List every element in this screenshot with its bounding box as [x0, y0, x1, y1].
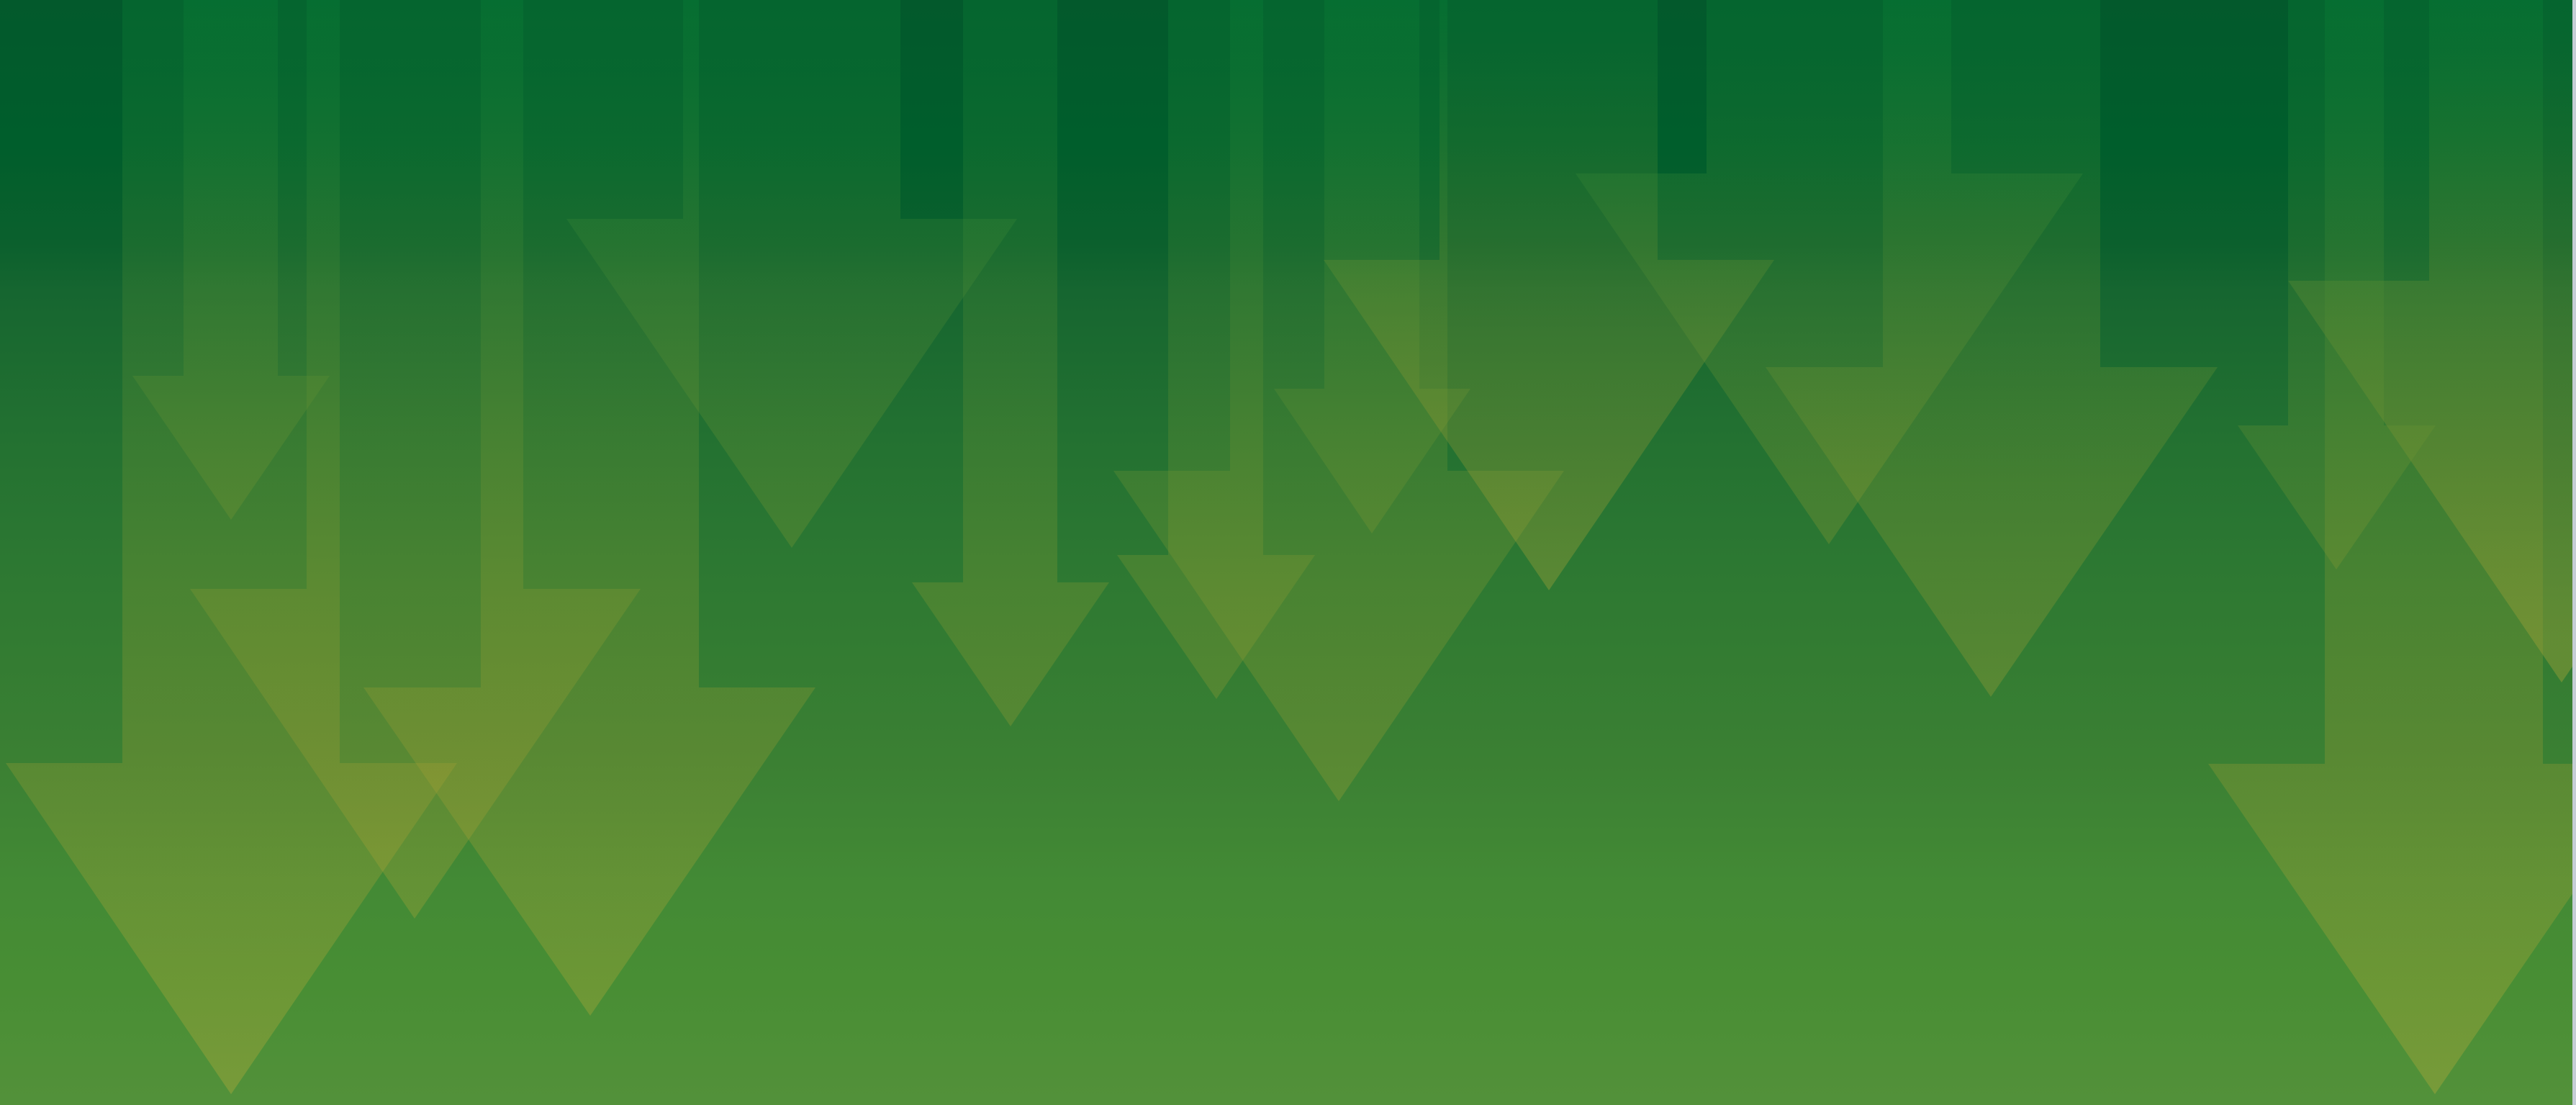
arrow 5: large upper left centre [566, 0, 1017, 548]
arrow 11: large upper right [1576, 0, 2083, 544]
arrow 2: small far left [132, 0, 330, 520]
arrow 1: large far left [6, 0, 457, 1094]
arrow 4: large left centre [363, 0, 815, 1016]
arrow 8: small centre [1117, 0, 1315, 699]
arrow 3: large left [190, 0, 641, 919]
arrow 13: largest, clipped at right edge [2288, 0, 2576, 682]
arrow 14: small far right [2238, 0, 2411, 569]
arrow 10: large centre right [1324, 0, 1774, 590]
arrow 9: small centre upper [1274, 0, 1470, 533]
arrow 15: large far right [2208, 0, 2576, 1094]
arrow 7: large centre [1113, 0, 1564, 801]
arrow 12: large right [1766, 0, 2218, 697]
arrow 6: small centre left [912, 0, 1109, 726]
